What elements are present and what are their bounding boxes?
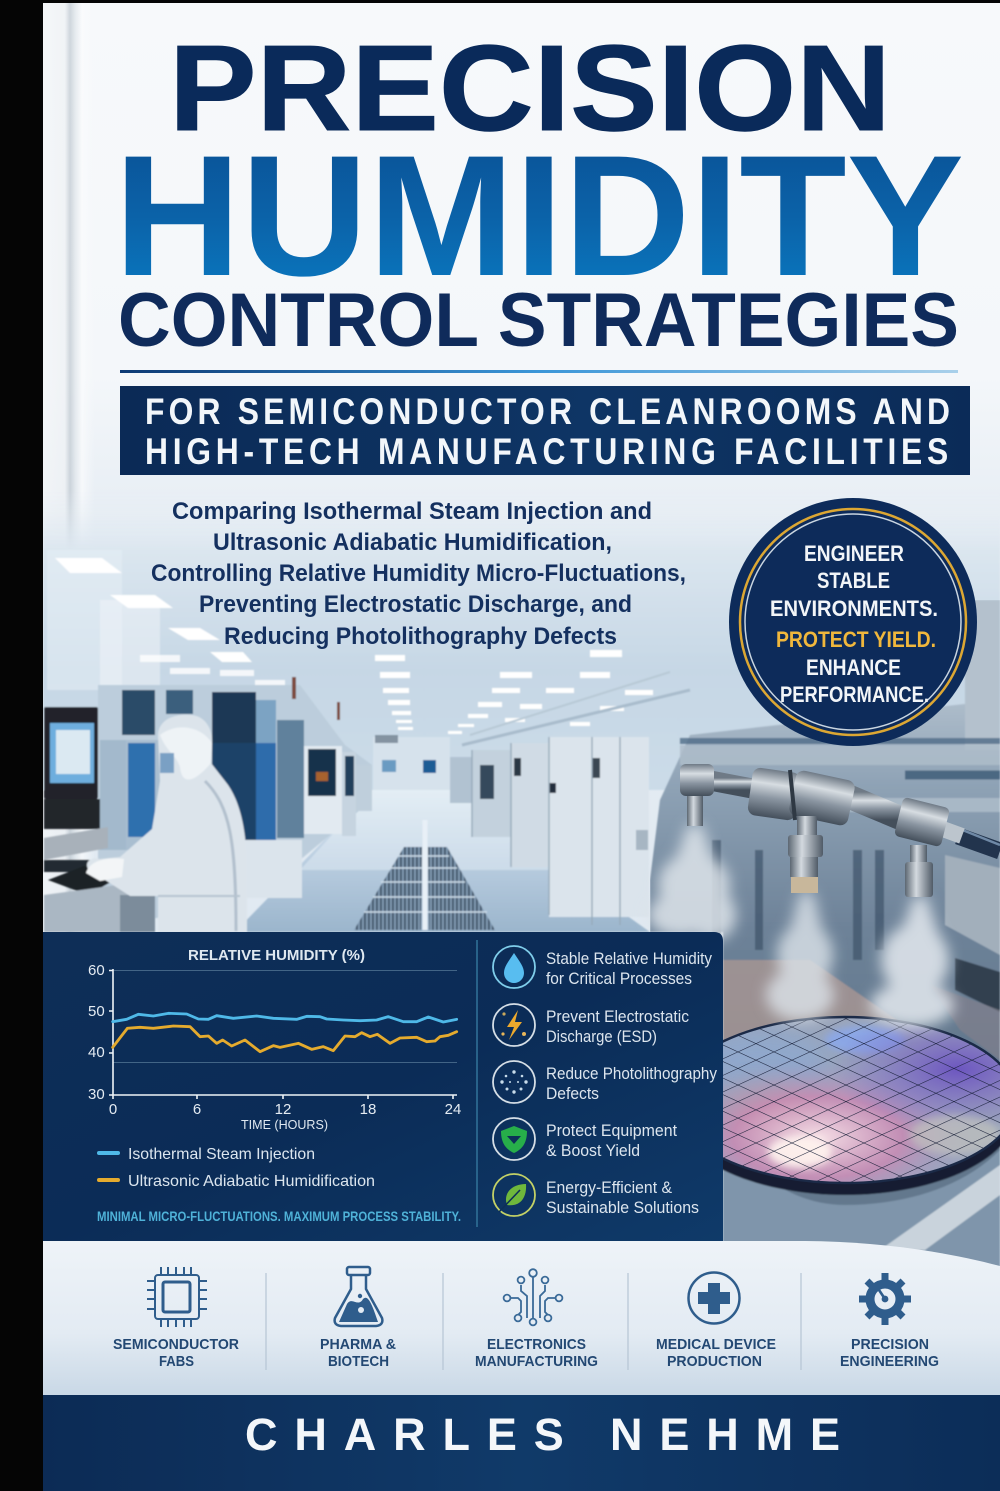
line chart: relative humidity [88, 947, 461, 1132]
line: isothermal steam injection [113, 1013, 457, 1022]
industry labels: MANUFACTURING [475, 1353, 598, 1370]
silicon wafer [723, 1018, 1000, 1182]
industry labels: FABS [159, 1353, 194, 1370]
benefit: photolithography: Defects [546, 1085, 599, 1103]
line chart: relative humidity: 24 [445, 1101, 461, 1118]
chart legend [97, 1146, 375, 1190]
description text [151, 498, 686, 650]
industry labels: PRECISION [851, 1336, 929, 1353]
benefit: protect equipment [493, 1118, 677, 1160]
benefit: photolithography [493, 1061, 718, 1103]
left machine row [98, 677, 372, 930]
chart legend: Ultrasonic Adiabatic Humidification [128, 1173, 375, 1190]
ceiling [43, 490, 1000, 790]
description text: Reducing Photolithography Defects [224, 623, 617, 650]
badge: engineer stable environments: PROTECT YIELD. [776, 627, 936, 652]
mist plumes [648, 825, 954, 1027]
plume three [870, 896, 954, 1027]
plume two [766, 892, 834, 1021]
badge: engineer stable environments: ENHANCE [806, 655, 901, 680]
description text: Comparing Isothermal Steam Injection and [172, 498, 652, 525]
industry labels: ENGINEERING [840, 1353, 939, 1370]
line chart: relative humidity: 60 [88, 962, 105, 979]
nozzles [687, 796, 703, 826]
subtitle banner: HIGH-TECH MANUFACTURING FACILITIES [145, 432, 948, 473]
industry labels [113, 1336, 939, 1370]
industry labels: MEDICAL DEVICE [656, 1336, 776, 1353]
footer: author name: CHARLES NEHME [245, 1409, 840, 1460]
benefit: ESD [493, 1004, 689, 1046]
panel: data and benefits [43, 932, 723, 1242]
wafer chuck [723, 1120, 1000, 1270]
benefit: stable humidity: for Critical Processes [546, 970, 692, 988]
left black edge [0, 0, 43, 1491]
subtitle banner [120, 386, 970, 475]
industry labels: ELECTRONICS [487, 1336, 586, 1353]
chart legend: Isothermal Steam Injection [128, 1146, 315, 1163]
line chart: relative humidity: TIME (HOURS) [241, 1117, 328, 1132]
floor grates [354, 820, 495, 930]
industry labels: PHARMA & [320, 1336, 396, 1353]
description text: Ultrasonic Adiabatic Humidification, [213, 529, 612, 556]
icon: circuit [504, 1269, 562, 1325]
benefit: stable humidity [493, 946, 713, 988]
pipe manifold [680, 764, 1000, 897]
benefit: photolithography: Reduce Photolithography [546, 1065, 718, 1083]
CONTROL STRATEGIES: CONTROL STRATEGIES [118, 278, 959, 363]
chart tagline: MINIMAL MICRO-FLUCTUATIONS. MAXIMUM PROCESS STABILITY. [97, 1208, 461, 1224]
line chart: relative humidity: RELATIVE HUMIDITY (%) [188, 947, 365, 964]
benefit: ESD: Discharge (ESD) [546, 1028, 657, 1046]
footer: author name [43, 1395, 1000, 1491]
industry labels: BIOTECH [328, 1353, 389, 1370]
benefit: energy efficient: Sustainable Solutions [546, 1199, 699, 1217]
description text: Controlling Relative Humidity Micro-Fluctuations, [151, 560, 686, 587]
floor [246, 804, 650, 932]
line chart: relative humidity: 30 [88, 1086, 105, 1103]
line chart: relative humidity: 6 [193, 1101, 201, 1118]
subtitle banner: FOR SEMICONDUCTOR CLEANROOMS AND [145, 392, 950, 433]
HUMIDITY: HUMIDITY [114, 120, 964, 312]
console and keyboard [44, 799, 155, 932]
ceiling lights [55, 558, 653, 734]
industries strip [43, 1241, 1000, 1395]
line chart: relative humidity: 12 [275, 1101, 291, 1118]
benefit: energy efficient [493, 1174, 699, 1217]
title [114, 20, 964, 363]
industry labels: SEMICONDUCTOR [113, 1336, 239, 1353]
icon: gear [859, 1273, 911, 1325]
worker [86, 715, 247, 936]
icon: medical cross [688, 1272, 740, 1324]
plume one [648, 825, 736, 941]
PRECISION: PRECISION [169, 20, 891, 156]
back wall [373, 737, 450, 793]
icon: microchip [147, 1267, 207, 1327]
benefit: stable humidity: Stable Relative Humidity [546, 950, 713, 968]
benefit: energy efficient: Energy-Efficient & [546, 1179, 672, 1197]
line chart: relative humidity: 0 [109, 1101, 117, 1118]
benefit: ESD: Prevent Electrostatic [546, 1008, 689, 1026]
left glass wall [47, 583, 121, 690]
description text: Preventing Electrostatic Discharge, and [199, 591, 632, 618]
badge: engineer stable environments: ENVIRONMENTS. [770, 596, 938, 621]
badge: engineer stable environments [729, 498, 977, 746]
badge: engineer stable environments: STABLE [817, 568, 890, 593]
right machine row [450, 672, 690, 925]
benefit: protect equipment: Protect Equipment [546, 1122, 677, 1140]
monitor [44, 707, 98, 799]
benefit: protect equipment: & Boost Yield [546, 1142, 640, 1160]
line chart: relative humidity: 40 [88, 1044, 105, 1061]
badge: engineer stable environments: PERFORMANCE. [780, 682, 929, 707]
benefits list [493, 946, 718, 1217]
photo: cleanroom aisle [43, 490, 1000, 936]
line: ultrasonic adiabatic humidification [113, 1026, 457, 1052]
background machinery [650, 700, 1000, 1270]
icon: flask [335, 1267, 382, 1326]
badge: engineer stable environments: ENGINEER [804, 541, 904, 566]
line chart: relative humidity: 18 [360, 1101, 376, 1118]
industry labels: PRODUCTION [667, 1353, 762, 1370]
line chart: relative humidity: 50 [88, 1003, 105, 1020]
photo: humidifier nozzles and wafer [648, 600, 1000, 1270]
